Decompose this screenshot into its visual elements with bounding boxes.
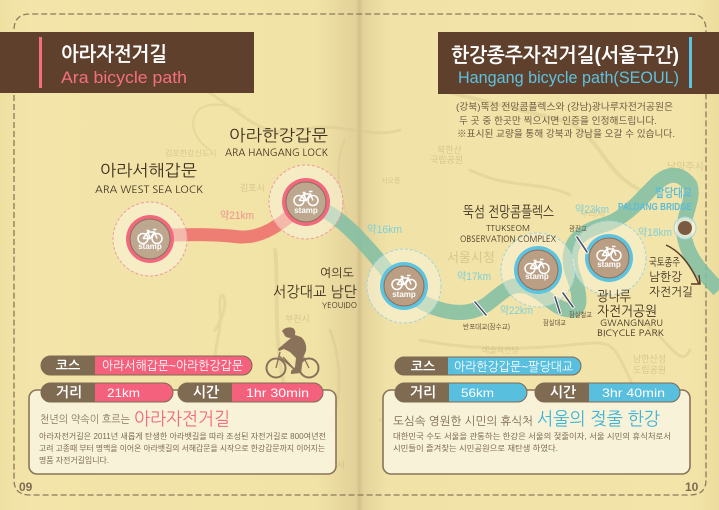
- info card: Ara: 아라자전거길은 2011년 새롭게 탄생한 아라뱃길을 따라 조성된 자전거길로 800여년전: [39, 431, 326, 441]
- label: Ara Hangang Lock: ARA HANGANG LOCK: [225, 149, 328, 158]
- time pill: Hangang: 3hr 40min: [602, 386, 665, 400]
- bridge labels: 광진교: [569, 224, 588, 233]
- label: Ttukseom: OBSERVATION COMPLEX: [460, 235, 556, 244]
- course pill: Hangang: 아라한강갑문~팔당대교: [454, 360, 573, 374]
- label: Paldang Bridge: [618, 186, 692, 213]
- course pill: Ara: 코스: [56, 358, 80, 373]
- distance labels: 약21km: [220, 208, 254, 222]
- label: Ara West Sea Lock: [95, 162, 203, 195]
- label: Yeouido: [273, 267, 358, 310]
- faint map labels: 김포한강신도시: [165, 148, 217, 158]
- stamp guidance note: ※표시된 교량을 통해 강북과 강남을 오갈 수 있습니다.: [457, 128, 675, 140]
- icon: cyclist: [266, 327, 318, 378]
- info card: Hangang: 대한민국 수도 서울을 관통하는 한강은 서울의 젖줄이자, 서울 시민의 휴식처로서: [393, 431, 671, 441]
- label: Ttukseom: [460, 204, 556, 244]
- distance pill: Ara: 21km: [107, 386, 140, 400]
- label: national cross-country path: [649, 257, 693, 298]
- label: Gwangnaru: 자전거공원: [597, 304, 657, 319]
- label: national cross-country path: 국토종주: [649, 257, 680, 268]
- header: Ara bicycle path: Ara bicycle path: [61, 68, 187, 87]
- course pill: Hangang: [395, 357, 581, 375]
- info card: Hangang: 시민들이 즐겨찾는 시민공원으로 재탄생 하였다.: [393, 443, 558, 453]
- header: Ara bicycle path: 아라자전거길: [61, 44, 167, 66]
- course pill: Ara: [41, 356, 252, 375]
- distance labels: 약18km: [638, 225, 672, 239]
- label: Gwangnaru: BICYCLE PARK: [597, 329, 665, 338]
- label: Gwangnaru: [597, 289, 665, 338]
- arrow: [666, 245, 700, 284]
- faint map labels: 예술의전당: [482, 345, 519, 355]
- bridge labels: 반포대교(잠수교): [463, 322, 510, 331]
- label: Yeouido: 여의도: [320, 267, 354, 279]
- faint map labels: 서울시청: [447, 250, 495, 265]
- stamp: Gwangnaru: stamp: [597, 260, 621, 269]
- time pill: Ara: 1hr 30min: [246, 386, 309, 400]
- distance pill: Ara: 거리: [56, 384, 82, 400]
- info card: Hangang: 도심속 영원한 시민의 휴식처: [393, 415, 533, 428]
- stamp: Ara Hangang Lock: [269, 165, 343, 239]
- faint map labels: 국립공원: [430, 155, 463, 165]
- end marker: Paldang Bridge: [674, 217, 696, 239]
- bridge labels: 잠실철교: [569, 310, 592, 319]
- faint map labels: 시흥시: [320, 459, 345, 470]
- stamp guidance note: (강북)뚝섬 전망콤플렉스와 (강남)광나루자전거공원은: [456, 101, 673, 113]
- time pill: Ara: 시간: [193, 384, 220, 400]
- label: Ara Hangang Lock: [225, 127, 328, 158]
- time pill: Hangang: [535, 383, 680, 402]
- distance labels: 약22km: [500, 303, 533, 317]
- distance pill: Hangang: [395, 383, 527, 402]
- faint map labels: 구리시: [580, 209, 605, 219]
- faint map labels: 도립공원: [633, 365, 666, 375]
- label: Yeouido: YEOUIDO: [322, 301, 357, 310]
- distance labels: 약23km: [575, 202, 609, 216]
- stamp: Yeouido: [367, 249, 441, 323]
- header: Hangang bicycle path: 한강종주자전거길(서울구간): [451, 44, 679, 67]
- label: Paldang Bridge: 팔당대교: [655, 186, 692, 200]
- faint map labels: 남한산성: [633, 354, 666, 364]
- faint map labels: 부천시: [285, 314, 310, 324]
- page number 10: 10: [685, 480, 699, 494]
- info card: Ara: [29, 390, 336, 474]
- bridge labels: 잠실대교: [543, 318, 566, 327]
- header: Hangang bicycle path: Hangang bicycle path(SEOUL): [458, 68, 679, 87]
- distance labels: 약16km: [367, 222, 402, 236]
- label: Gwangnaru: GWANGNARU: [600, 319, 663, 328]
- info card: Ara: 아라자전거길: [134, 409, 230, 429]
- info card: Ara: 고려 고종때 부터 명맥을 이어온 아라뱃길의 서해갑문을 시작으로 한강갑문까지 이어지는: [39, 443, 325, 453]
- route: Ara path: [150, 202, 306, 237]
- label: Paldang Bridge: PALDANG BRIDGE: [618, 202, 692, 213]
- distance pill: Ara: [41, 383, 173, 402]
- faint map labels: 남양주시: [667, 161, 704, 173]
- bridge markers: [475, 237, 587, 315]
- time pill: Ara: [178, 383, 323, 402]
- distance labels: [220, 202, 672, 317]
- bridge labels: [463, 224, 592, 331]
- page number 09: 09: [19, 480, 33, 494]
- label: national cross-country path: 자전거길: [649, 285, 693, 298]
- label: Ara Hangang Lock: 아라한강갑문: [229, 127, 328, 144]
- info card: Hangang: [383, 390, 690, 474]
- faint map labels: 북한산: [437, 145, 462, 155]
- distance pill: Hangang: 거리: [410, 384, 436, 400]
- stamp: Ara West Sea Lock: [113, 202, 187, 276]
- stamp: Ara West Sea Lock: stamp: [138, 242, 162, 251]
- info card: Ara: 천년의 약속이 흐르는: [40, 413, 131, 426]
- label: Yeouido: 서강대교 남단: [273, 284, 358, 300]
- course pill: Hangang: 코스: [411, 359, 435, 374]
- label: Ara West Sea Lock: 아라서해갑문: [100, 162, 197, 179]
- faint map labels: 김포시: [240, 182, 265, 193]
- stamp guidance note: 두 곳 중 한곳만 찍으시면 인증을 인정해드립니다.: [459, 115, 657, 127]
- faint map labels: 서오릉: [381, 176, 401, 185]
- label: Ttukseom: TTUKSEOM: [486, 224, 530, 233]
- stamp: Ttukseom: stamp: [525, 272, 549, 281]
- info card: Hangang: 서울의 젖줄 한강: [537, 409, 660, 429]
- time pill: Hangang: 시간: [550, 384, 577, 400]
- faint map labels: [165, 145, 704, 470]
- header: Ara bicycle path: [0, 32, 254, 93]
- label: Gwangnaru: 광나루: [597, 289, 631, 304]
- route: Hangang river: [306, 175, 719, 312]
- label: Ara West Sea Lock: ARA WEST SEA LOCK: [95, 186, 203, 195]
- faint map background: [193, 90, 690, 440]
- info card: Ara: 명품 자전거길입니다.: [39, 455, 109, 465]
- distance labels: 약17km: [457, 269, 491, 283]
- stamp: Yeouido: stamp: [392, 290, 416, 299]
- label: national cross-country path: 남한강: [649, 270, 682, 283]
- course pill: Ara: 아라서해갑문~아라한강갑문: [102, 359, 243, 373]
- label: Ttukseom: 뚝섬 전망콤플렉스: [463, 204, 554, 220]
- stamp: Ttukseom: [501, 233, 575, 307]
- stamp: Ara Hangang Lock: stamp: [294, 206, 318, 215]
- header: Hangang bicycle path: [438, 32, 719, 94]
- stamp guidance note: [456, 101, 675, 140]
- stamp: Gwangnaru: [572, 221, 646, 295]
- distance pill: Hangang: 56km: [461, 386, 494, 400]
